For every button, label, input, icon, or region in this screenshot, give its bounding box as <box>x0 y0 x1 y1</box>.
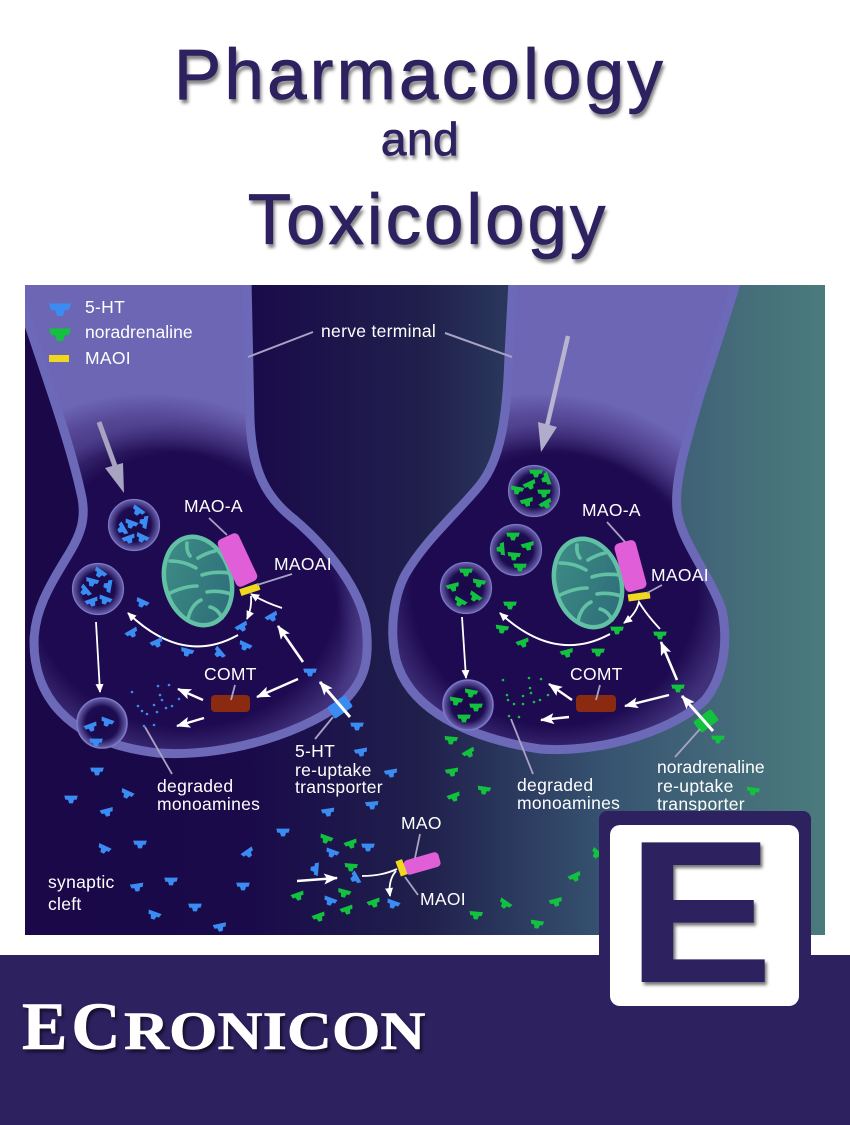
label: nerve terminal: nerve terminal <box>321 321 436 341</box>
publisher wordmark: RONICON <box>124 1001 426 1061</box>
label: synaptic cleft <box>48 872 115 914</box>
enzyme: right COMT: COMT <box>570 664 623 684</box>
enzyme: left COMT <box>204 664 257 712</box>
label: noradrenaline re-uptake transporter: transporter <box>657 794 745 814</box>
label: degraded monoamines right: degraded <box>517 775 593 795</box>
label: MAO and MAOI <box>401 813 466 909</box>
label: degraded monoamines right: monoamines <box>517 793 620 813</box>
mitochondrion: right <box>552 536 624 630</box>
panel: synapse diagram <box>25 285 825 935</box>
noradrenaline molecules <box>290 602 760 929</box>
enzyme: left MAO-A with MAOI <box>216 532 260 596</box>
arrow: right vesicle transport <box>538 336 568 452</box>
label: MAO and MAOI: MAOI <box>420 889 466 909</box>
vesicle: left 2 <box>72 564 124 614</box>
label: MAO-A and MAOAI left <box>184 496 332 585</box>
5-HT molecules <box>64 597 401 933</box>
label: synaptic cleft: cleft <box>48 894 82 914</box>
vesicle: right 2 <box>490 524 542 576</box>
transporter: noradrenaline re-uptake <box>693 709 719 733</box>
title line: and: and <box>381 113 459 165</box>
vesicle: left fusing <box>77 698 127 748</box>
legend MAOI: MAOI <box>85 348 131 368</box>
title <box>174 36 666 266</box>
vesicle: right fusing <box>443 680 493 730</box>
enzyme: central MAO with MAOI <box>395 851 442 877</box>
label: MAO-A and MAOAI left: MAOAI <box>274 554 332 574</box>
publisher wordmark: EC <box>22 988 124 1064</box>
legend 5-HT: 5-HT <box>85 297 125 317</box>
label: MAO-A and MAOAI left: MAO-A <box>184 496 243 516</box>
left nerve terminal <box>18 280 367 754</box>
label: degraded monoamines left: degraded <box>157 776 233 796</box>
label: MAO-A and MAOAI right: MAOAI <box>651 565 709 585</box>
publisher wordmark <box>22 988 428 1064</box>
arrows: left terminal <box>96 594 350 726</box>
vesicle: right 3 <box>440 562 492 614</box>
footer band <box>0 955 850 1125</box>
label: nerve terminal <box>248 321 512 357</box>
label: noradrenaline re-uptake transporter <box>657 729 765 814</box>
title line: Toxicology: Toxicology <box>248 181 608 260</box>
label: noradrenaline re-uptake transporter: noradrenaline <box>657 757 765 777</box>
label: degraded monoamines left: monoamines <box>157 794 260 814</box>
degraded monoamine dots: left <box>131 684 180 727</box>
vesicle: left 1 <box>108 500 160 550</box>
mitochondrion: left <box>162 534 234 628</box>
label: 5-HT re-uptake transporter <box>295 717 383 797</box>
title line: Pharmacology: Pharmacology <box>174 36 666 115</box>
legend 5-HT <box>49 301 124 316</box>
transporter: 5-HT re-uptake <box>327 695 353 719</box>
right nerve terminal <box>393 280 737 750</box>
enzyme: left COMT: COMT <box>204 664 257 684</box>
label: MAO-A and MAOAI right: MAO-A <box>582 500 641 520</box>
legend noradrenaline <box>49 325 192 341</box>
legend noradrenaline: noradrenaline <box>85 322 193 342</box>
label: 5-HT re-uptake transporter: 5-HT <box>295 741 335 761</box>
label: noradrenaline re-uptake transporter: re-uptake <box>657 776 734 796</box>
logo white tile <box>610 825 799 1006</box>
label: synaptic cleft: synaptic <box>48 872 115 892</box>
legend <box>49 301 192 364</box>
vesicle: right 1 <box>508 466 560 516</box>
arrows: right terminal <box>462 602 713 731</box>
arrow: left vesicle transport <box>99 422 124 493</box>
logo badge <box>599 811 811 1025</box>
enzyme: right COMT <box>570 664 623 712</box>
label: MAO and MAOI: MAO <box>401 813 442 833</box>
label: 5-HT re-uptake transporter: re-uptake <box>295 760 372 780</box>
label: degraded monoamines right <box>511 719 620 813</box>
legend MAOI <box>49 352 129 364</box>
arrows: synaptic cleft MAO <box>297 869 397 896</box>
enzyme: right MAO-A with MAOI <box>613 539 650 601</box>
label: degraded monoamines left <box>145 727 260 814</box>
label: MAO-A and MAOAI right <box>582 500 709 593</box>
degraded monoamine dots: right <box>502 677 549 718</box>
label: 5-HT re-uptake transporter: transporter <box>295 777 383 797</box>
diagram background <box>25 285 825 935</box>
